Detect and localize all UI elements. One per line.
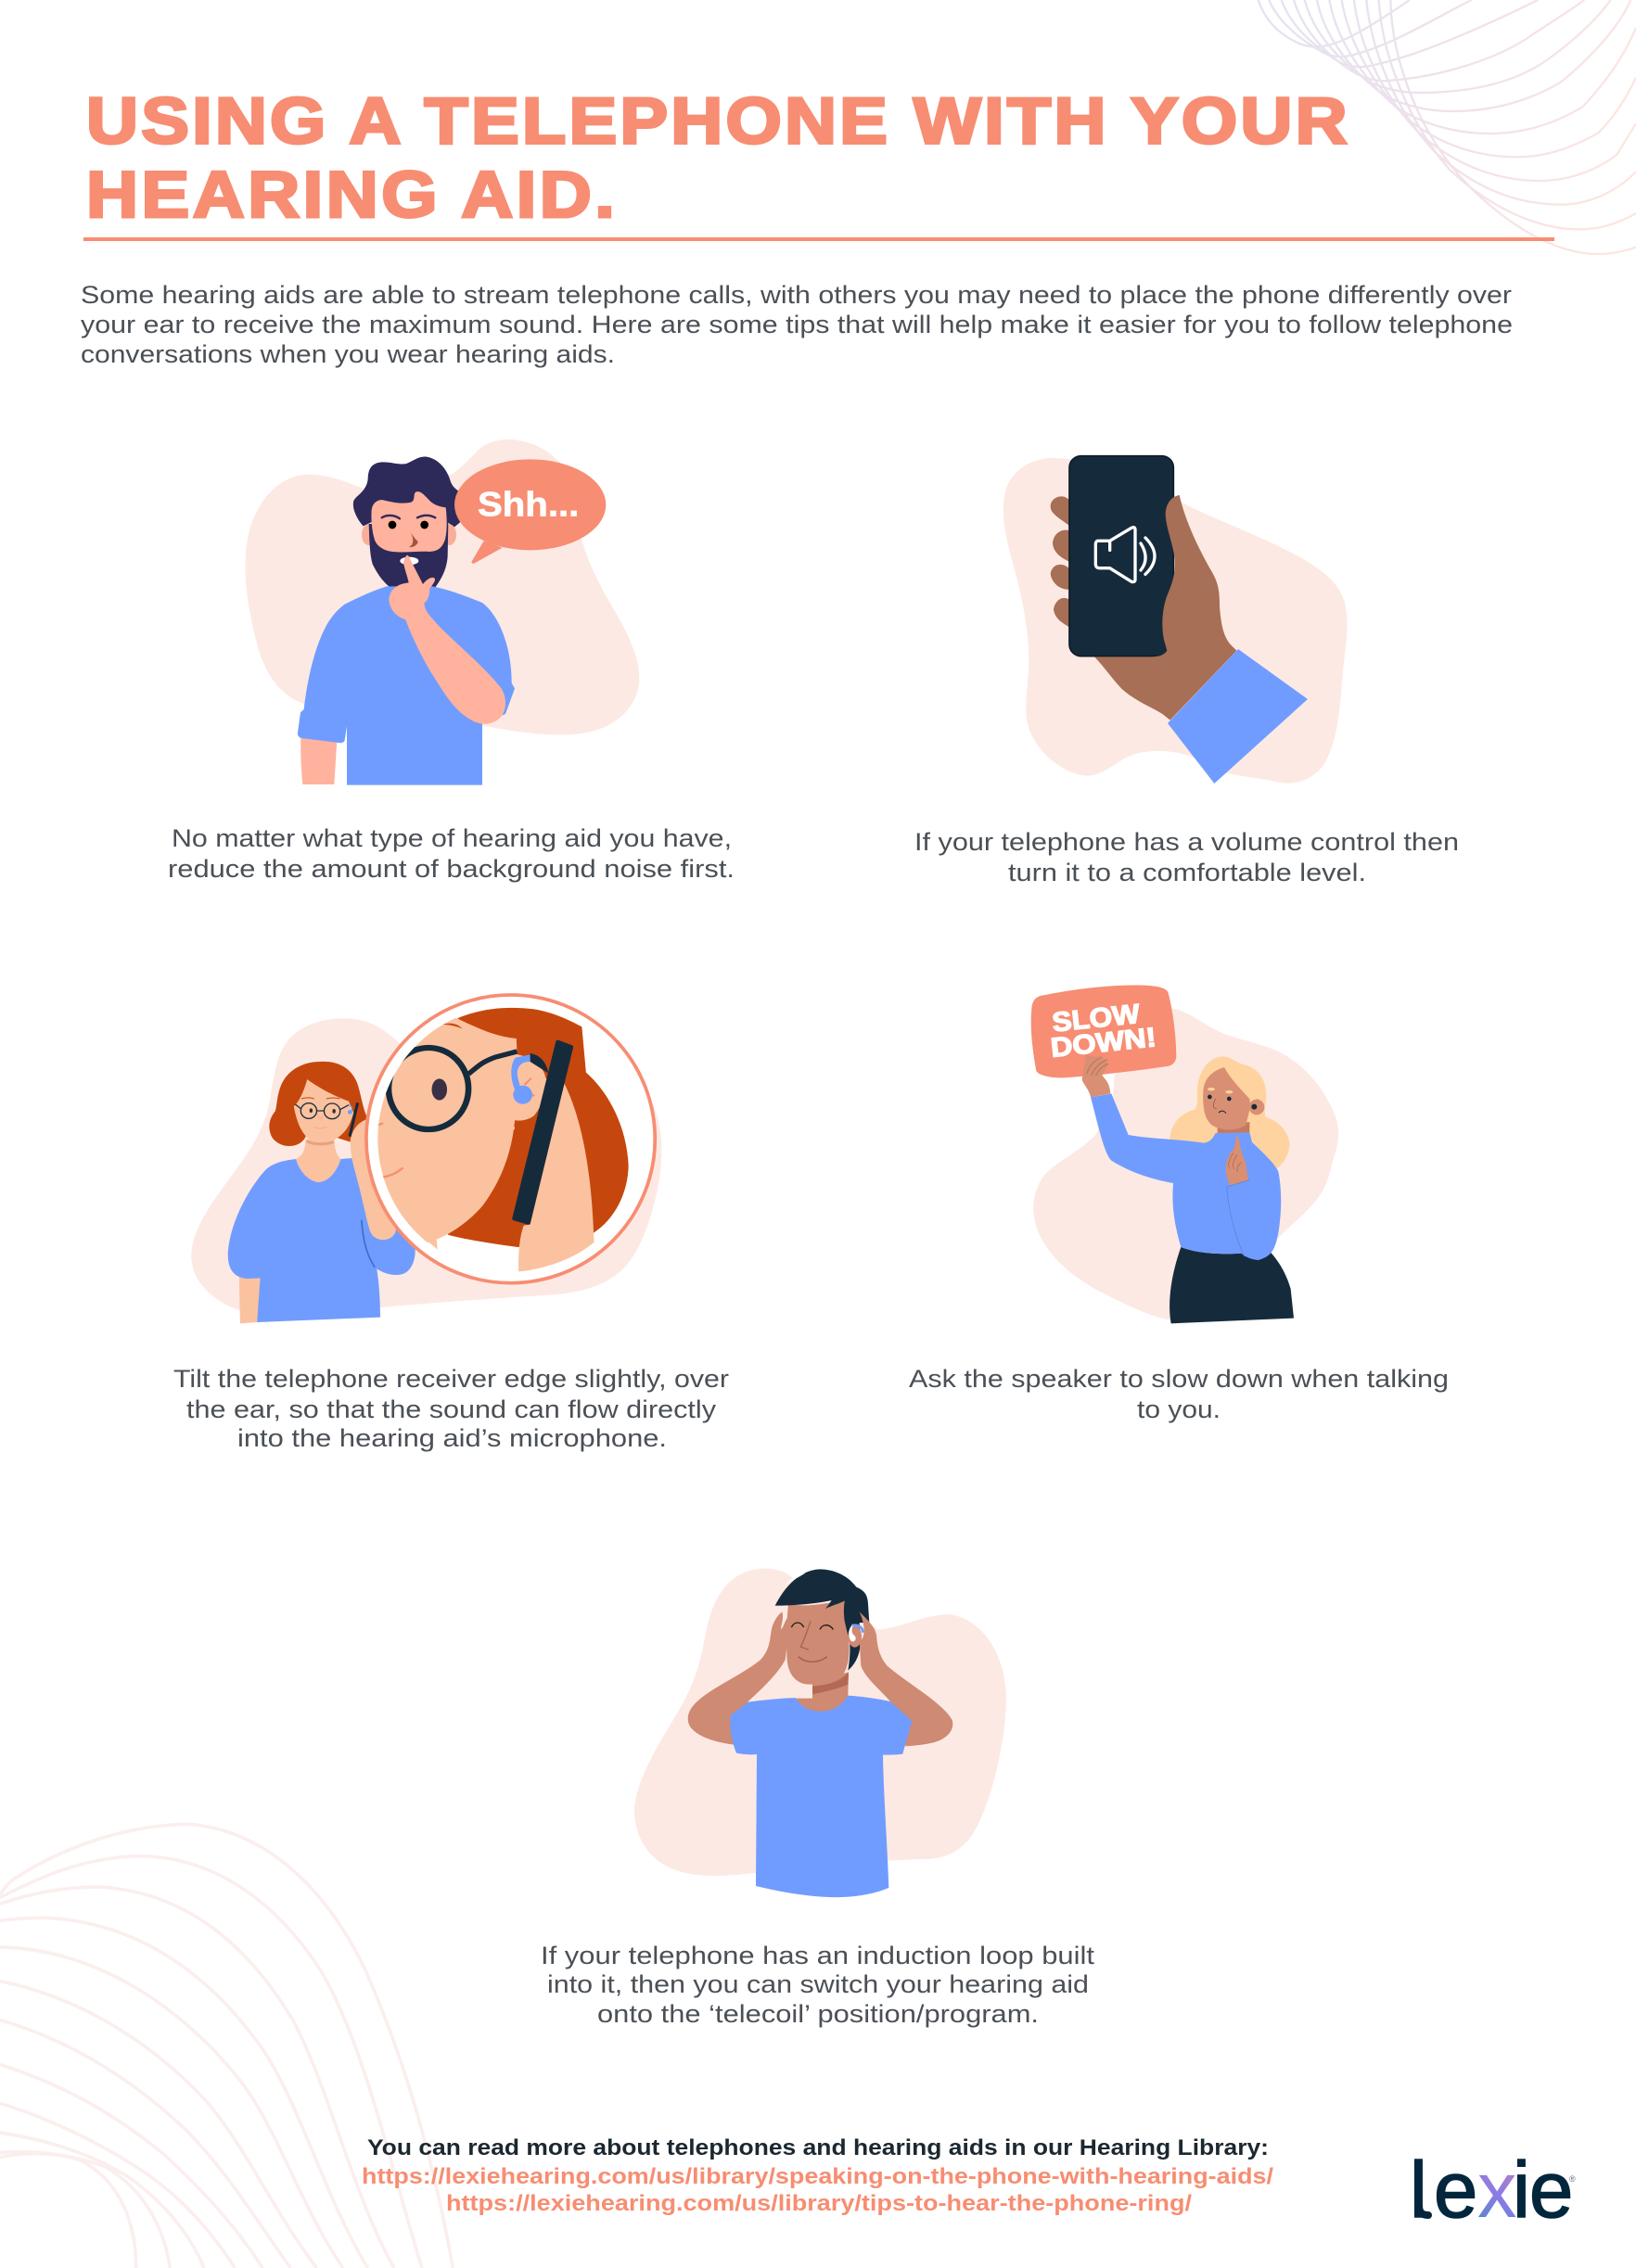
caption 1: No matter what type of hearing aid you have, (172, 824, 732, 852)
caption 1: reduce the amount of background noise first. (168, 855, 735, 883)
background blob (191, 1018, 661, 1310)
caption 2 (914, 828, 1459, 886)
footer text and links: You can read more about telephones and hearing aids in our Hearing Library: (367, 2135, 1269, 2160)
background blob (1003, 458, 1348, 784)
speech bubble: Shh (454, 459, 606, 564)
caption 3: the ear, so that the sound can flow directly (186, 1395, 717, 1423)
title (86, 84, 1348, 231)
intro paragraph: Some hearing aids are able to stream telephone calls, with others you may need to place the phone differently over (81, 281, 1512, 309)
intro paragraph: conversations when you wear hearing aids. (81, 340, 615, 368)
caption 3: into the hearing aid’s microphone. (237, 1424, 667, 1452)
background blob (246, 440, 639, 734)
intro paragraph (81, 281, 1513, 368)
man with hands on ears (688, 1569, 952, 1897)
sleeve cuff (1168, 649, 1308, 784)
magnified ear circle (336, 995, 655, 1283)
caption 5 (541, 1942, 1095, 2028)
background blob (634, 1568, 1006, 1876)
phone (1069, 456, 1173, 656)
hand fingers (1051, 496, 1076, 628)
title: HEARING AID. (86, 158, 615, 231)
sign: slow down: SLOW (1051, 999, 1142, 1038)
logo: lexie: ® (1569, 2174, 1576, 2184)
hand thumb and palm (1094, 495, 1236, 720)
icon: speaker volume (1095, 528, 1155, 582)
panel: tilt the receiver illustration (191, 995, 661, 1323)
title underline (83, 237, 1554, 241)
woman with blonde hair (1082, 1054, 1294, 1323)
caption 4: Ask the speaker to slow down when talking (909, 1365, 1449, 1393)
footer text and links: https://lexiehearing.com/us/library/tips-to-hear-the-phone-ring/ (446, 2191, 1192, 2216)
caption 3: Tilt the telephone receiver edge slightly, over (173, 1365, 729, 1393)
caption 4: to you. (1137, 1395, 1221, 1423)
caption 4 (909, 1365, 1449, 1423)
man with beard (298, 457, 515, 785)
panel: volume control illustration (1003, 456, 1348, 784)
caption 5: into it, then you can switch your hearing aid (547, 1970, 1089, 1998)
woman on the phone (228, 1062, 415, 1323)
panel: telecoil illustration (634, 1568, 1006, 1897)
title: USING A TELEPHONE WITH YOUR (86, 84, 1348, 158)
sign: slow down (1031, 986, 1176, 1077)
decorative line mesh top right (1259, 0, 1636, 254)
caption 1 (168, 824, 735, 883)
speech bubble: Shh: Shh... (478, 485, 579, 524)
sign: slow down: DOWN! (1049, 1022, 1157, 1064)
panel: reduce background noise illustration (246, 440, 639, 785)
decorative line mesh bottom left (0, 1824, 453, 2268)
intro paragraph: your ear to receive the maximum sound. Here are some tips that will help make it easier for you to follow telephone (81, 311, 1513, 338)
panel: ask speaker to slow down illustration (1031, 986, 1338, 1323)
footer text and links: https://lexiehearing.com/us/library/speaking-on-the-phone-with-hearing-aids/ (362, 2164, 1273, 2189)
background blob (1033, 1008, 1338, 1321)
caption 5: onto the ‘telecoil’ position/program. (597, 2000, 1039, 2028)
caption 2: If your telephone has a volume control then (914, 828, 1459, 856)
caption 2: turn it to a comfortable level. (1008, 859, 1366, 886)
caption 3 (173, 1365, 729, 1452)
footer text and links (362, 2135, 1273, 2216)
logo: lexie: lexie (1410, 2147, 1573, 2235)
caption 5: If your telephone has an induction loop built (541, 1942, 1095, 1969)
